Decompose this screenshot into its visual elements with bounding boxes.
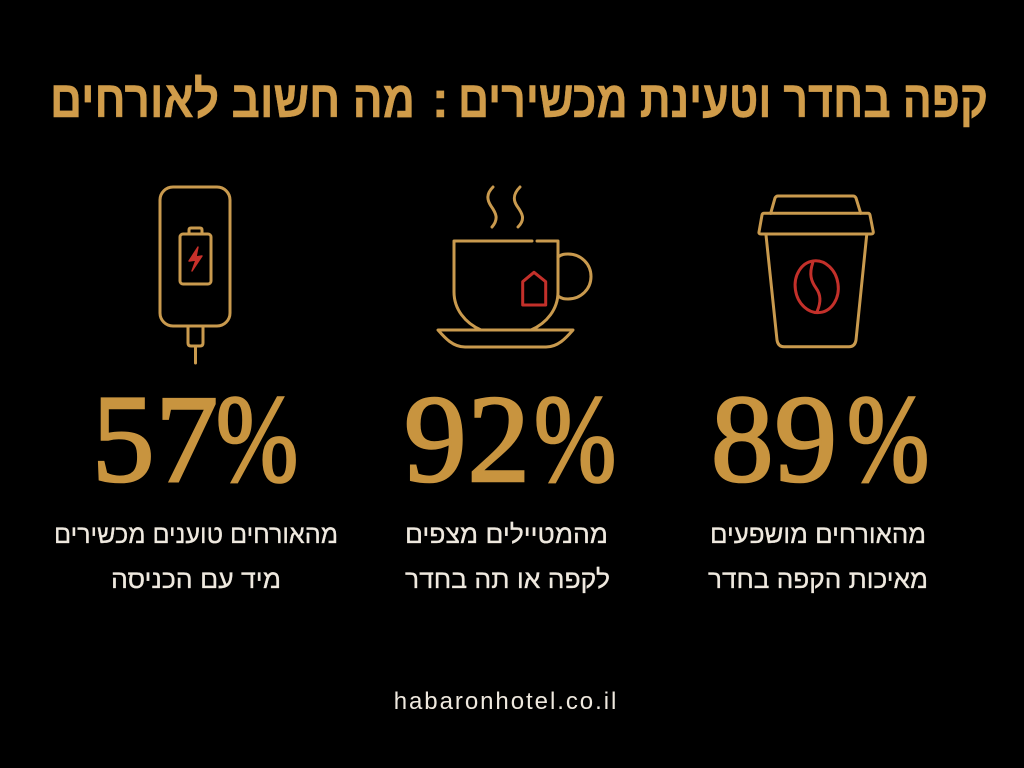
stat: 92%: % [534, 371, 617, 509]
stat: 89%: % [847, 371, 930, 509]
title: : [432, 71, 449, 129]
caption: devices: מיד עם הכניסה [111, 564, 281, 594]
caption: travellers: מהמטיילים מצפים [405, 519, 608, 549]
stat: 57% [92, 371, 299, 509]
website: habaronhotel.co.il [394, 688, 618, 715]
caption: travellers: לקפה או תה בחדר [405, 564, 610, 594]
title: מה חשוב לאורחים [50, 71, 415, 129]
caption: travellers [405, 519, 610, 594]
icon: phone charging [160, 187, 230, 363]
icon: coffee cup with tea tag [438, 187, 591, 347]
caption: coffee quality [708, 519, 928, 594]
caption: coffee quality: מאיכות הקפה בחדר [708, 564, 928, 594]
stat: 89% [711, 371, 930, 509]
icon: takeaway cup with coffee bean [759, 196, 873, 347]
stat: 92%: 92 [404, 371, 531, 509]
caption: devices: מהאורחים טוענים מכשירים [54, 519, 338, 549]
caption: devices [54, 519, 338, 594]
stat: 92% [404, 371, 617, 509]
caption: coffee quality: מהאורחים מושפעים [710, 519, 926, 549]
stat: 57%: % [216, 371, 299, 509]
stat: 89%: 89 [711, 371, 838, 509]
stat: 57%: 57 [92, 371, 219, 509]
title [50, 71, 988, 129]
